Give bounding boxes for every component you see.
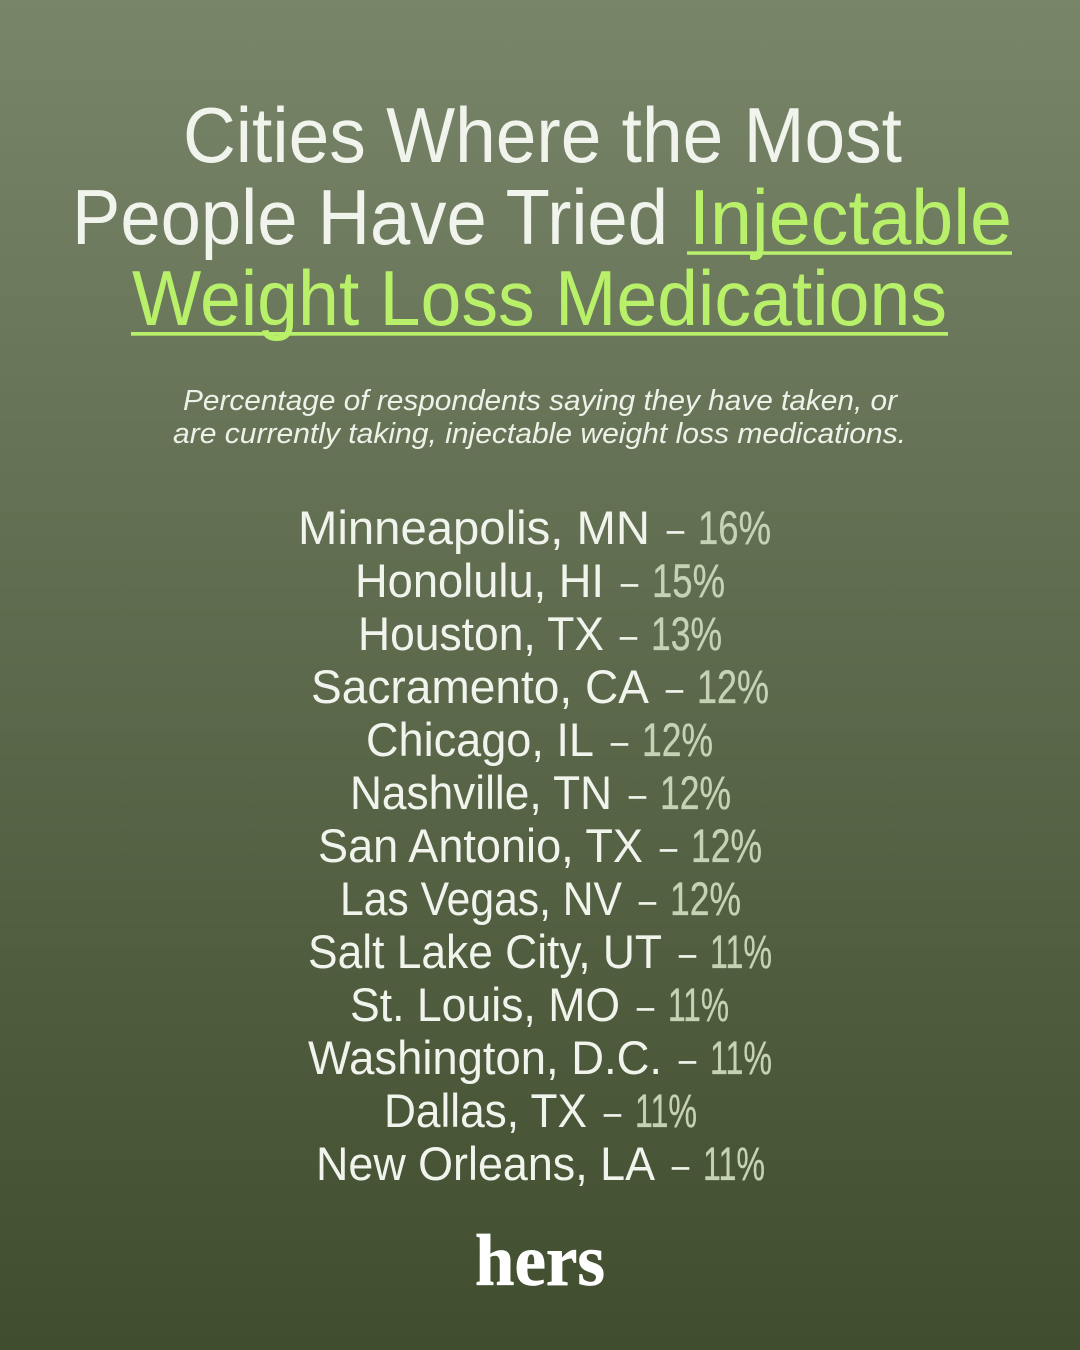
city: Minneapolis: Minneapolis, MN [298,502,650,555]
city: Nashville: Nashville, TN [350,767,612,820]
ranked city list [298,502,772,1191]
city: Nashville: 12% [660,767,731,820]
title: Injectable [689,173,1012,261]
city: Houston: – [620,618,638,654]
city: Sacramento: 12% [697,661,769,714]
city: Sacramento: – [666,672,684,706]
city: St. Louis: – [637,990,655,1024]
city: Salt Lake City: – [679,936,697,972]
city: Houston: 13% [651,608,722,661]
city: Salt Lake City: 11% [710,926,772,979]
city: Las Vegas: Las Vegas, NV [340,873,622,926]
city: Chicago: – [611,724,629,760]
logo: hers: hers [475,1220,605,1301]
city: San Antonio: – [660,830,678,866]
city: San Antonio: 12% [691,820,762,873]
city: St. Louis: 11% [668,979,729,1032]
city: Minneapolis: – [667,512,685,548]
title: Cities Where the Most [183,91,902,179]
city: Washington: – [679,1042,697,1078]
city: Dallas: 11% [635,1085,697,1138]
subtitle: are currently taking, injectable weight loss medications. [173,418,906,450]
city: Chicago: Chicago, IL [366,714,594,767]
city: Chicago: 12% [642,714,713,767]
city: Chicago [366,714,713,767]
city: Minneapolis: 16% [698,502,771,555]
title: Weight Loss Medications [132,254,947,342]
city: St. Louis: St. Louis, MO [350,979,620,1032]
city: Dallas: Dallas, TX [384,1085,587,1138]
title: People Have Tried [72,173,668,261]
city: Honolulu: Honolulu, HI [355,555,604,608]
city: New Orleans: New Orleans, LA [316,1138,655,1191]
city: Washington: 11% [710,1032,772,1085]
city: New Orleans: 11% [703,1138,765,1191]
city: Honolulu: 15% [652,555,725,608]
subtitle [173,385,906,450]
city: Dallas [384,1085,697,1138]
city: Dallas: – [604,1096,622,1130]
city: Honolulu: – [621,566,639,600]
city: San Antonio: San Antonio, TX [318,820,643,873]
title [72,91,1012,342]
city: Salt Lake City: Salt Lake City, UT [308,926,662,979]
city: Las Vegas: – [639,884,657,918]
city: Nashville: – [629,778,647,812]
city: New Orleans: – [672,1148,690,1184]
city: Las Vegas: 12% [670,873,741,926]
city: Sacramento: Sacramento, CA [311,661,649,714]
city: Washington: Washington, D.C. [308,1032,662,1085]
subtitle: Percentage of respondents saying they have taken, or [183,385,898,417]
city: Houston: Houston, TX [358,608,604,661]
